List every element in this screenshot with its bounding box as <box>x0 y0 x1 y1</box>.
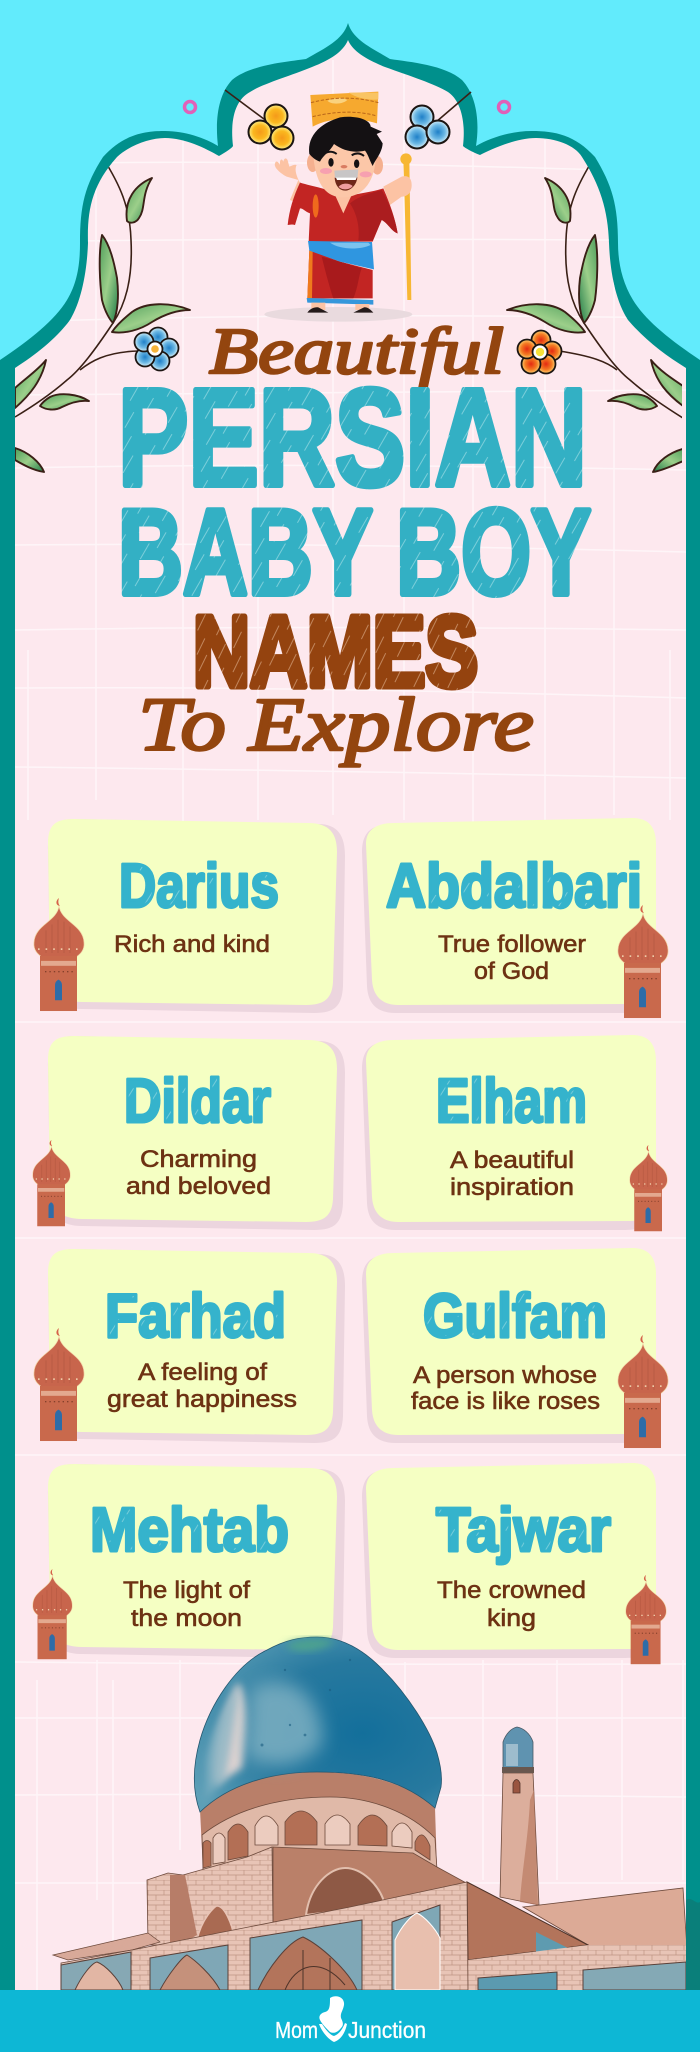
flower: red right <box>518 330 562 374</box>
drum <box>200 1772 437 1870</box>
card: Farhad: A feeling of <box>138 1359 267 1386</box>
blue arch panels <box>61 1905 686 1990</box>
low left roof <box>53 1933 160 1960</box>
card: Mehtab: the moon <box>131 1605 242 1632</box>
central block <box>273 1847 470 1925</box>
card: Elham: Elham <box>436 1067 587 1136</box>
decoration: pink ring left <box>184 102 196 112</box>
mosque illustration <box>53 1637 690 1995</box>
card: Abdalbari <box>362 818 668 1018</box>
lower right wall <box>468 1945 686 1990</box>
side brown wall <box>467 1882 588 1960</box>
card: Farhad: great happiness <box>107 1386 297 1413</box>
stem and yellow flower cluster <box>225 90 294 150</box>
title: To Explore: To Explore <box>138 683 534 767</box>
footer bar <box>0 1990 700 2052</box>
card: Abdalbari: of God <box>474 958 549 985</box>
vine: left <box>15 158 190 472</box>
card: Abdalbari: Abdalbari <box>386 852 642 921</box>
character: boy with crown and staff <box>264 92 412 322</box>
small minaret tower <box>500 1727 539 1905</box>
card: Darius: Rich and kind <box>114 931 270 958</box>
card: Tajwar <box>362 1463 666 1664</box>
central arch <box>306 1868 385 1915</box>
blue triangle <box>536 1932 568 1952</box>
card: Mehtab <box>33 1464 345 1659</box>
title: NAMES: NAMES <box>193 596 478 708</box>
card: Mehtab: Mehtab <box>90 1496 289 1565</box>
card: Farhad: Farhad <box>105 1282 286 1351</box>
card: Darius <box>34 819 345 1013</box>
card: Elham <box>362 1035 667 1231</box>
card: Dildar: and beloved <box>126 1173 271 1200</box>
card: Elham: inspiration <box>450 1174 574 1201</box>
back roof <box>522 1888 686 1945</box>
logo mark: mother and baby <box>319 1996 347 2042</box>
blue dome <box>194 1637 442 1812</box>
left wing small arch <box>198 1905 232 1936</box>
lower main wall <box>61 1882 468 1990</box>
card: Abdalbari: True follower <box>438 931 586 958</box>
right edge stain <box>686 1899 700 1990</box>
card: Dildar <box>33 1036 345 1230</box>
decoration: pink ring right <box>498 102 510 112</box>
card: Elham: A beautiful <box>450 1147 574 1174</box>
pilaster <box>170 1875 197 1942</box>
logo wordmark: Junction: Junction <box>348 2017 426 2043</box>
logo wordmark: Mom: Mom <box>275 2017 318 2043</box>
MomJunction logo <box>275 1996 426 2043</box>
left wing <box>147 1847 273 1945</box>
card: Farhad <box>34 1249 345 1443</box>
card: Tajwar: king <box>487 1605 536 1632</box>
flower: blue left <box>134 328 178 370</box>
card: Darius: Darius <box>119 852 279 921</box>
card: Gulfam <box>362 1248 668 1448</box>
card: Tajwar: The crowned <box>437 1577 586 1604</box>
card: Dildar: Dildar <box>124 1067 271 1136</box>
card: Gulfam: Gulfam <box>423 1282 607 1351</box>
card: Gulfam: A person whose <box>413 1362 597 1389</box>
card: Tajwar: Tajwar <box>436 1496 611 1565</box>
card: Dildar: Charming <box>140 1146 257 1173</box>
card: Mehtab: The light of <box>123 1577 250 1604</box>
stem and blue flower cluster <box>406 92 471 148</box>
title: Beautiful: Beautiful <box>209 315 504 388</box>
card: Gulfam: face is like roses <box>411 1388 600 1415</box>
vine: right <box>507 158 686 472</box>
